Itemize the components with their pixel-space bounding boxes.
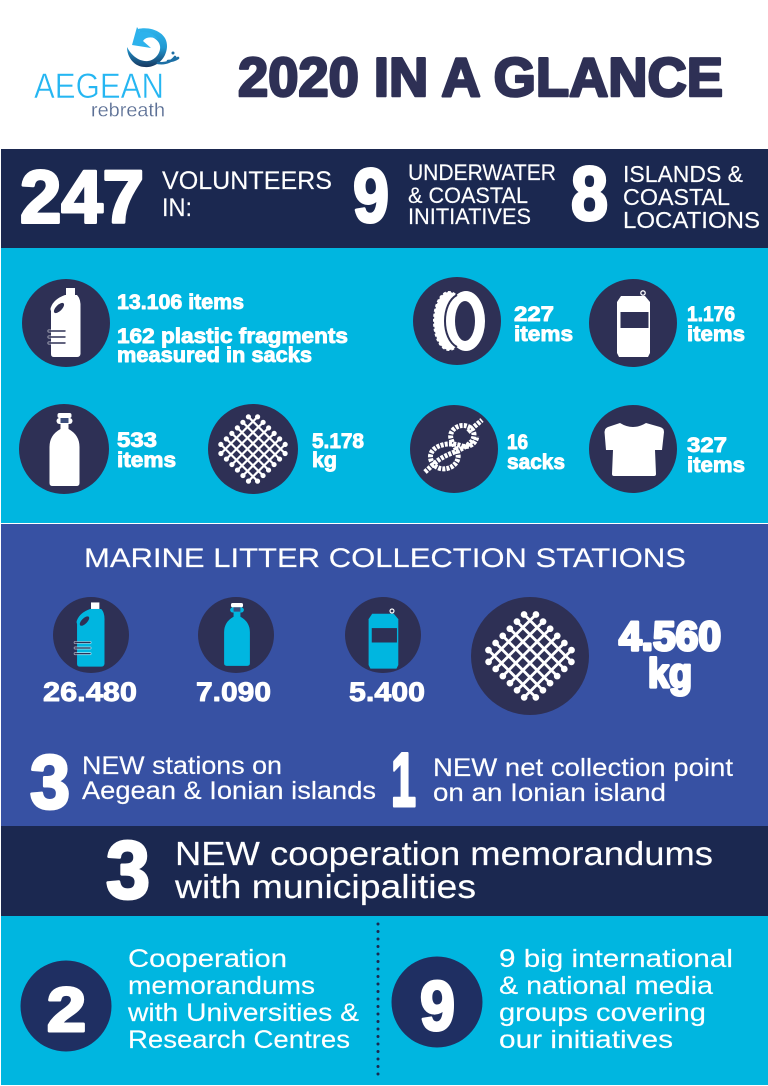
item: cans: items [687, 323, 745, 346]
stat: 8 locations [571, 152, 760, 237]
stat: 8 locations: LOCATIONS [623, 207, 760, 233]
stat: universities: Research Centres [128, 1026, 350, 1054]
new stations: Aegean & Ionian islands [82, 777, 376, 805]
memorandums text [174, 835, 713, 905]
item: nets: kg [312, 449, 337, 472]
station stat: cans: 5.400 [349, 677, 425, 707]
stat: 9 initiatives: INITIATIVES [408, 204, 531, 229]
panel: marine litter collection stations [1, 524, 768, 826]
stat: universities: Cooperation [128, 945, 287, 973]
station stat: nets: kg [648, 650, 692, 696]
station stat: containers [43, 597, 137, 707]
item: clothing [589, 405, 745, 493]
item: glass bottles: items [117, 449, 176, 472]
panel: municipalities [1, 825, 768, 916]
stat: 247 volunteers: 247 [20, 156, 144, 238]
new net collection point: NEW net collection point [433, 754, 733, 782]
item: rope [410, 405, 565, 493]
stat: 9 initiatives: 9 [353, 154, 389, 239]
item: plastic containers: 162 plastic fragments [117, 325, 348, 348]
new net collection point [391, 738, 733, 823]
stat: 8 locations: 8 [571, 152, 608, 237]
panel background [1, 524, 768, 826]
item: plastic containers: measured in sacks [117, 344, 312, 367]
station stat: nets: 4.560 [619, 613, 721, 659]
panel background [1, 248, 768, 523]
item: glass bottles [19, 404, 176, 494]
item: rope: sacks [507, 451, 565, 474]
stat: 9 initiatives: UNDERWATER [408, 160, 556, 185]
new stations: 3 [30, 740, 70, 825]
panel: headline stats [1, 149, 768, 248]
panel: partnerships and media [1, 916, 768, 1085]
logo wordmark: AEGEAN [34, 67, 164, 106]
item: tyres: 227 [514, 303, 554, 326]
section heading: MARINE LITTER COLLECTION STATIONS [84, 543, 686, 573]
memorandums text: NEW cooperation memorandums [175, 835, 713, 872]
stat: 247 volunteers: VOLUNTEERS [162, 167, 332, 195]
new stations [30, 740, 376, 825]
band background [1, 826, 768, 916]
stat: 247 volunteers: IN: [162, 194, 192, 222]
icon: swirl arrow [127, 27, 178, 67]
item: rope: 16 [507, 431, 528, 454]
stat: media [392, 945, 733, 1054]
station stat: cans [345, 597, 425, 707]
new net collection point: 1 [391, 738, 416, 823]
station stat: bottles [196, 597, 274, 707]
logo: Aegean Rebreath [34, 27, 178, 122]
dotted divider [376, 924, 380, 1078]
title: 2020 IN A GLANCE [238, 46, 723, 108]
station stat: containers: 26.480 [43, 677, 137, 707]
stat: media: groups covering [499, 999, 706, 1027]
item: glass bottles: 533 [117, 429, 157, 452]
stat: universities: 2 [47, 976, 86, 1045]
item: plastic containers [22, 279, 348, 367]
new stations: NEW stations on [82, 752, 282, 780]
station stat: nets [471, 597, 721, 715]
item: clothing: 327 [687, 434, 727, 457]
station stat: bottles: 7.090 [196, 677, 271, 707]
stat: 8 locations: COASTAL [623, 184, 730, 210]
item: cans: 1.176 [687, 303, 735, 326]
stat: 9 initiatives: & COASTAL [408, 183, 528, 208]
item: plastic containers: 13.106 items [117, 291, 244, 314]
stat: media: 9 [420, 967, 455, 1045]
header [34, 27, 723, 122]
item: cans [589, 279, 745, 367]
logo subtitle: rebreath [91, 100, 165, 122]
memorandums text: with municipalities [174, 868, 476, 905]
stat: 247 volunteers [20, 156, 332, 238]
stat: media: our initiatives [499, 1026, 673, 1054]
stat: media: 9 big international [499, 945, 733, 973]
item: tyres [413, 277, 573, 365]
stat: 9 initiatives [353, 154, 556, 239]
number 3: 3 [106, 825, 150, 916]
item: nets: 5.178 [312, 430, 364, 453]
stat: universities: memorandums [128, 972, 315, 1000]
item: clothing: items [687, 454, 745, 477]
band background [1, 149, 768, 248]
panel background [1, 916, 768, 1085]
item: tyres: items [514, 323, 573, 346]
stat: universities [20, 945, 359, 1054]
stat: 8 locations: ISLANDS & [623, 161, 743, 187]
item: nets [208, 404, 364, 494]
stat: universities: with Universities & [127, 999, 359, 1027]
stat: media: & national media [499, 972, 713, 1000]
panel: collected litter [1, 248, 768, 523]
new net collection point: on an Ionian island [433, 779, 666, 807]
